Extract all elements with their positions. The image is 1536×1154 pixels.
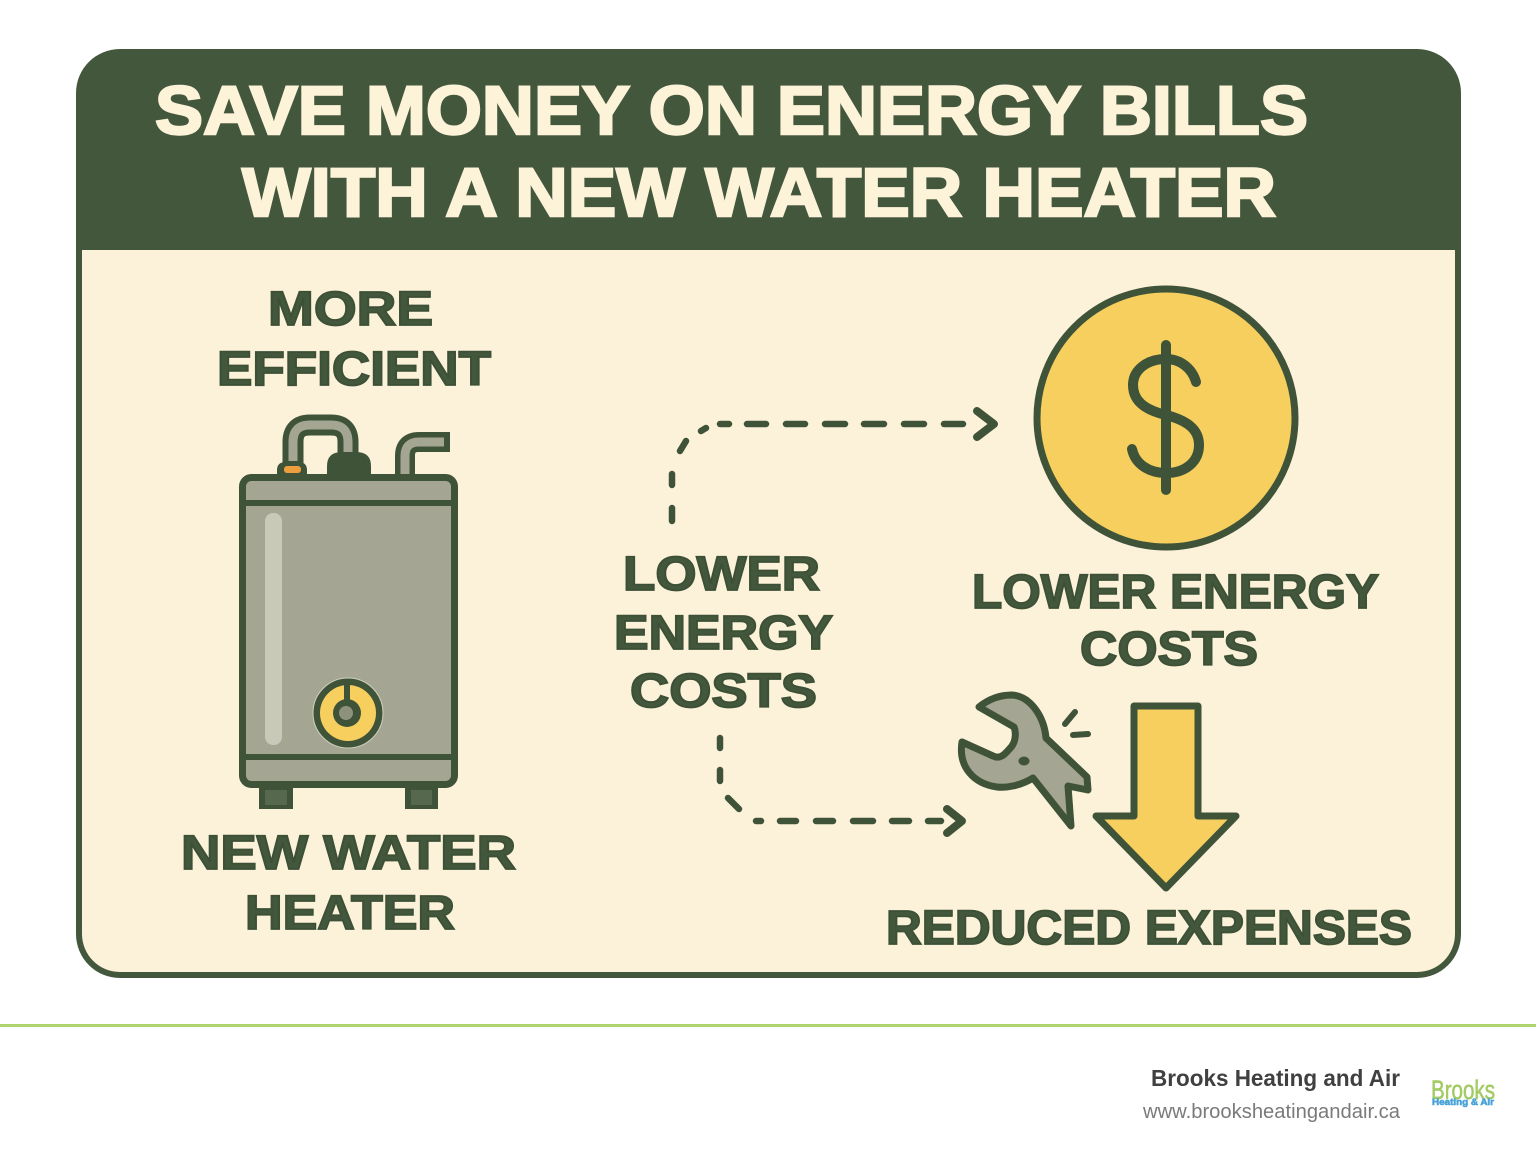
logo: Heating & Air <box>1432 1097 1495 1107</box>
label: new water heater <box>181 827 516 940</box>
label: lower energy costs center: LOWER <box>623 548 820 601</box>
icon: wrench <box>961 695 1088 826</box>
label: lower energy costs center: ENERGY <box>614 607 833 660</box>
pipes <box>293 425 450 476</box>
label: lower energy costs right: COSTS <box>1080 623 1258 676</box>
dome fitting <box>327 452 371 476</box>
label: more efficient: EFFICIENT <box>217 343 491 396</box>
icon: down arrow <box>1096 706 1236 888</box>
footer: company name and website: Brooks Heating and Air <box>1151 1065 1400 1091</box>
footer rule <box>0 1024 1536 1027</box>
arrow: dashed to coin <box>672 411 994 521</box>
label: new water heater: NEW WATER <box>181 827 516 880</box>
icon: water heater <box>242 425 455 809</box>
title <box>155 72 1308 231</box>
label: lower energy costs right <box>972 566 1379 676</box>
highlight <box>265 513 282 745</box>
icon: dollar coin <box>1037 289 1295 547</box>
footer: company name and website <box>1142 1065 1401 1123</box>
label: reduced expenses: REDUCED EXPENSES <box>886 902 1412 955</box>
label: new water heater: HEATER <box>245 887 455 940</box>
arrow: dashed to wrench <box>720 738 962 833</box>
tank body <box>242 478 454 784</box>
logo: Brooks <box>1431 1075 1495 1105</box>
footer: company name and website: www.brooksheatingandair.ca <box>1142 1101 1401 1123</box>
feet <box>259 786 438 809</box>
label: more efficient: MORE <box>268 283 433 336</box>
title: WITH A NEW WATER HEATER <box>242 154 1276 231</box>
title: SAVE MONEY ON ENERGY BILLS <box>155 72 1308 149</box>
dial <box>313 678 383 748</box>
label: lower energy costs center <box>614 548 833 718</box>
label: lower energy costs center: COSTS <box>630 665 817 718</box>
valve nut <box>277 462 307 476</box>
label: lower energy costs right: LOWER ENERGY <box>972 566 1379 619</box>
panel: main card <box>76 49 1461 978</box>
label: more efficient <box>217 283 491 396</box>
